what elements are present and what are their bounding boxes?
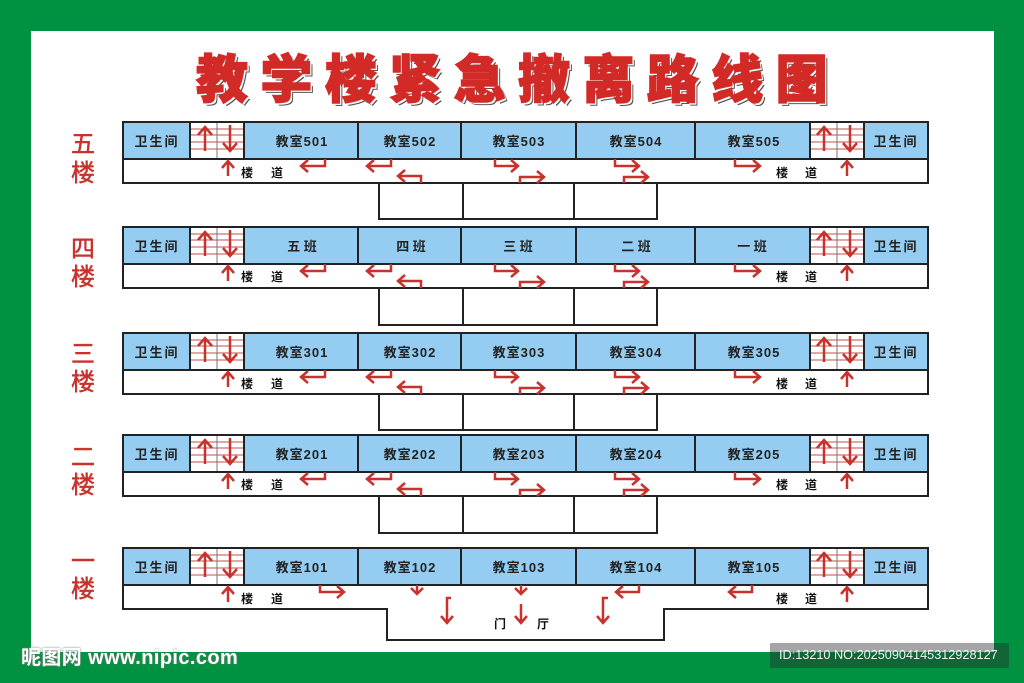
- corridor labels 4: [241, 269, 817, 284]
- room labels 4: 卫生间: [134, 239, 180, 254]
- corridor and hall labels 1: 厅: [537, 617, 549, 631]
- corridor labels 3: 道: [805, 376, 817, 391]
- room labels 1: 教室102: [384, 560, 436, 575]
- room labels 1: 教室105: [728, 560, 780, 575]
- floor label 2: 楼: [71, 472, 95, 499]
- room labels 4: 二 班: [621, 239, 651, 254]
- floor 2: [71, 435, 928, 533]
- corridor and hall labels 1: 楼: [776, 591, 788, 606]
- left stairs 3: [190, 333, 244, 370]
- annex rooms 4: [379, 288, 657, 325]
- floor 1: [71, 548, 928, 640]
- room labels 4: [134, 239, 919, 254]
- floor 3: [71, 333, 928, 430]
- corridor labels 3: 楼: [241, 376, 253, 391]
- escape arrows 5: [222, 159, 853, 183]
- watermark: image id: [770, 643, 1009, 668]
- floor label 5: 楼: [71, 160, 95, 187]
- left stairs 1: [190, 548, 244, 585]
- left stairs 4: [190, 227, 244, 264]
- corridor labels 2: 楼: [776, 477, 788, 492]
- room labels 3: 教室305: [728, 345, 780, 360]
- annex rooms 5: [379, 183, 657, 219]
- corridor and hall labels 1: [241, 591, 817, 631]
- right stairs 3: [810, 333, 864, 370]
- corridor labels 2: 道: [271, 477, 283, 492]
- room labels 4: 一 班: [737, 239, 767, 254]
- right stairs 2: [810, 435, 864, 472]
- room labels 4: 五 班: [287, 239, 317, 254]
- room labels 2: 教室205: [728, 447, 780, 462]
- corridor labels 3: [241, 376, 817, 391]
- room labels 5: [134, 134, 919, 149]
- room labels 3: 教室302: [384, 345, 436, 360]
- corridor labels 3: 楼: [776, 376, 788, 391]
- rooms row 4: [123, 227, 928, 264]
- room labels 3: 教室301: [276, 345, 328, 360]
- floor label 1: 楼: [71, 576, 95, 603]
- floor 5: [71, 122, 928, 219]
- annex rooms 2: [379, 496, 657, 533]
- room labels 3: 卫生间: [134, 345, 180, 360]
- room labels 5: 卫生间: [134, 134, 180, 149]
- corridor 4: [123, 264, 928, 288]
- corridor and hall labels 1: 道: [805, 591, 817, 606]
- rooms row 5: [123, 122, 928, 159]
- floor label 4: 四: [71, 236, 95, 263]
- floor label 2: 二: [71, 444, 95, 471]
- room labels 1: 教室104: [610, 560, 662, 575]
- corridor labels 5: 楼: [776, 165, 788, 180]
- corridor 3: [123, 370, 928, 394]
- floor label 5: 五: [71, 131, 95, 158]
- room labels 3: 卫生间: [873, 345, 919, 360]
- room labels 5: 教室502: [384, 134, 436, 149]
- left stairs 2: [190, 435, 244, 472]
- room labels 5: 教室501: [276, 134, 328, 149]
- room labels 2: 教室201: [276, 447, 328, 462]
- right stairs 4: [810, 227, 864, 264]
- title: 教学楼紧急撤离路线图: [196, 52, 840, 110]
- floor label 4: 楼: [71, 264, 95, 291]
- floor 4: [71, 227, 928, 325]
- room labels 1: 卫生间: [134, 560, 180, 575]
- escape arrows 4: [222, 264, 853, 288]
- floor label 3: 三: [71, 341, 95, 368]
- room labels 4: 四 班: [396, 239, 426, 254]
- room labels 2: 教室204: [610, 447, 662, 462]
- room labels 2: 卫生间: [134, 447, 180, 462]
- corridor labels 4: 楼: [241, 269, 253, 284]
- corridor labels 2: 楼: [241, 477, 253, 492]
- escape arrows 3: [222, 370, 853, 394]
- left stairs 5: [190, 122, 244, 159]
- rooms row 3: [123, 333, 928, 370]
- corridor and hall labels 1: 门: [494, 616, 506, 631]
- room labels 2: 教室202: [384, 447, 436, 462]
- corridor and hall labels 1: 楼: [241, 591, 253, 606]
- floor label 1: 一: [71, 548, 95, 575]
- room labels 1: 教室103: [493, 560, 545, 575]
- room labels 4: 卫生间: [873, 239, 919, 254]
- corridor labels 4: 道: [805, 269, 817, 284]
- corridor labels 5: [241, 165, 817, 180]
- room labels 1: [134, 560, 919, 575]
- corridor labels 4: 道: [271, 269, 283, 284]
- corridor labels 5: 道: [805, 165, 817, 180]
- corridor labels 5: 道: [271, 165, 283, 180]
- room labels 5: 教室504: [610, 134, 662, 149]
- room labels 2: 卫生间: [873, 447, 919, 462]
- corridor and hall labels 1: 道: [271, 591, 283, 606]
- escape arrows 1: [222, 585, 853, 623]
- corridor labels 3: 道: [271, 376, 283, 391]
- room labels 3: 教室304: [610, 345, 662, 360]
- room labels 5: 教室505: [728, 134, 780, 149]
- room labels 5: 卫生间: [873, 134, 919, 149]
- corridor 5: [123, 159, 928, 183]
- corridor labels 2: 道: [805, 477, 817, 492]
- rooms row 2: [123, 435, 928, 472]
- corridor and entrance hall: [123, 585, 928, 640]
- room labels 2: [134, 447, 919, 462]
- escape arrows 2: [222, 472, 853, 496]
- right stairs 1: [810, 548, 864, 585]
- watermark: site logo: 昵图网 www.nipic.com: [21, 647, 238, 669]
- corridor 2: [123, 472, 928, 496]
- room labels 1: 卫生间: [873, 560, 919, 575]
- room labels 2: 教室203: [493, 447, 545, 462]
- watermark: image id: ID:13210 NO:20250904145312928127: [779, 648, 998, 662]
- floor label 3: 楼: [71, 369, 95, 396]
- room labels 1: 教室101: [276, 560, 328, 575]
- room labels 3: [134, 345, 919, 360]
- corridor labels 5: 楼: [241, 165, 253, 180]
- room labels 3: 教室303: [493, 345, 545, 360]
- annex rooms 3: [379, 394, 657, 430]
- room labels 5: 教室503: [493, 134, 545, 149]
- corridor labels 4: 楼: [776, 269, 788, 284]
- corridor labels 2: [241, 477, 817, 492]
- right stairs 5: [810, 122, 864, 159]
- rooms row 1: [123, 548, 928, 585]
- room labels 4: 三 班: [503, 239, 533, 254]
